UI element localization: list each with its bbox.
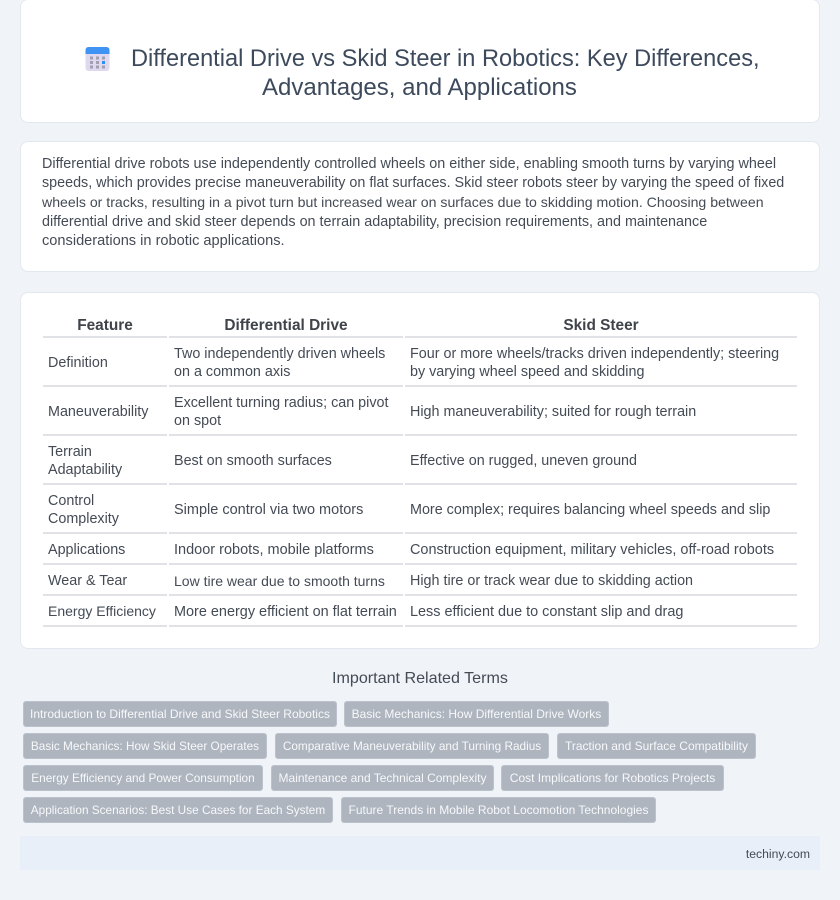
table header: Feature [77,317,133,334]
row: terrain adaptability: Effective on rugged, uneven ground [410,453,637,469]
row: maneuverability: Maneuverability [48,404,148,420]
row: wear and tear: Wear & Tear [48,573,127,589]
row: wear and tear [48,573,693,589]
related terms tags: Introduction to Differential Drive and Skid Steer Robotics [30,707,330,721]
related terms tags: Traction and Surface Compatibility [565,739,748,753]
row: applications: Indoor robots, mobile platforms [174,542,374,558]
related terms tags: Cost Implications for Robotics Projects [510,771,715,785]
row: applications: Construction equipment, military vehicles, off-road robots [410,542,774,558]
row: applications [48,542,774,558]
row: energy efficiency: More energy efficient on flat terrain [174,604,397,620]
row: terrain adaptability [48,444,637,478]
row: terrain adaptability: Adaptability [48,462,122,478]
related terms tags: Basic Mechanics: How Differential Drive Works [352,707,601,721]
row: maneuverability: High maneuverability; suited for rough terrain [410,404,696,420]
row: wear and tear: High tire or track wear due to skidding action [410,573,693,589]
text block: intro: differential drive and skid steer depends on terrain adaptability, precision requirements, and maintenance [42,214,707,230]
related terms tags: Comparative Maneuverability and Turning Radius [283,739,541,753]
row: terrain adaptability: Best on smooth surfaces [174,453,332,469]
panel: header [20,0,820,123]
table header: Differential Drive [224,317,348,334]
related terms tags: Application Scenarios: Best Use Cases for Each System [31,803,325,817]
title: Advantages, and Applications [262,74,577,101]
row: control complexity: Complexity [48,511,119,527]
related terms tags [23,701,756,823]
heading: important related terms: Important Related Terms [332,669,508,687]
row: energy efficiency: Less efficient due to constant slip and drag [410,604,683,620]
text block: intro [42,156,784,248]
row: definition: Four or more wheels/tracks driven independently; steering [410,346,779,362]
row: definition [48,346,779,380]
row: definition: by varying wheel speed and skidding [410,364,644,380]
row: control complexity: More complex; requires balancing wheel speeds and slip [410,502,770,518]
row: definition: Two independently driven wheels [174,346,385,362]
row: maneuverability: Excellent turning radius; can pivot [174,395,388,411]
related terms tags: Future Trends in Mobile Robot Locomotion Technologies [349,803,648,817]
title [131,46,760,101]
related terms tags: Maintenance and Technical Complexity [279,771,486,785]
table header [77,317,639,334]
footer source: techiny.com [746,846,810,860]
text block: intro: speeds, which provides precise maneuverability on flat surfaces. Skid steer robots steer by varying the speed of fixed [42,175,784,191]
row: control complexity: Control [48,493,94,509]
row: energy efficiency: Energy Efficiency [48,603,156,619]
row: terrain adaptability: Terrain [48,444,92,460]
related terms tags: Energy Efficiency and Power Consumption [31,771,255,785]
text block: intro: considerations in robotic applications. [42,232,285,248]
row: energy efficiency [48,603,683,620]
table header: Skid Steer [563,317,639,334]
row: maneuverability [48,395,696,429]
title: Differential Drive vs Skid Steer in Robotics: Key Differences, [131,46,760,72]
row: control complexity: Simple control via two motors [174,502,363,518]
text block: intro: wheels or tracks, resulting in a pivot turn but increased wear on surfaces due to skidding motion. Choosing between [42,194,764,210]
row: definition: on a common axis [174,364,290,380]
icon: calendar grid [86,47,110,71]
panel: intro paragraph [20,141,820,272]
row: applications: Applications [48,542,125,558]
row: maneuverability: on spot [174,413,221,429]
row: wear and tear: Low tire wear due to smooth turns [174,573,385,589]
footer bar [20,836,820,870]
row: definition: Definition [48,355,108,371]
row: control complexity [48,493,770,527]
related terms tags: Basic Mechanics: How Skid Steer Operates [31,739,259,753]
comparison table [43,317,797,627]
text block: intro: Differential drive robots use independently controlled wheels on either side, enabling smooth turns by varying wheel [42,156,776,172]
panel: comparison table [20,292,820,649]
